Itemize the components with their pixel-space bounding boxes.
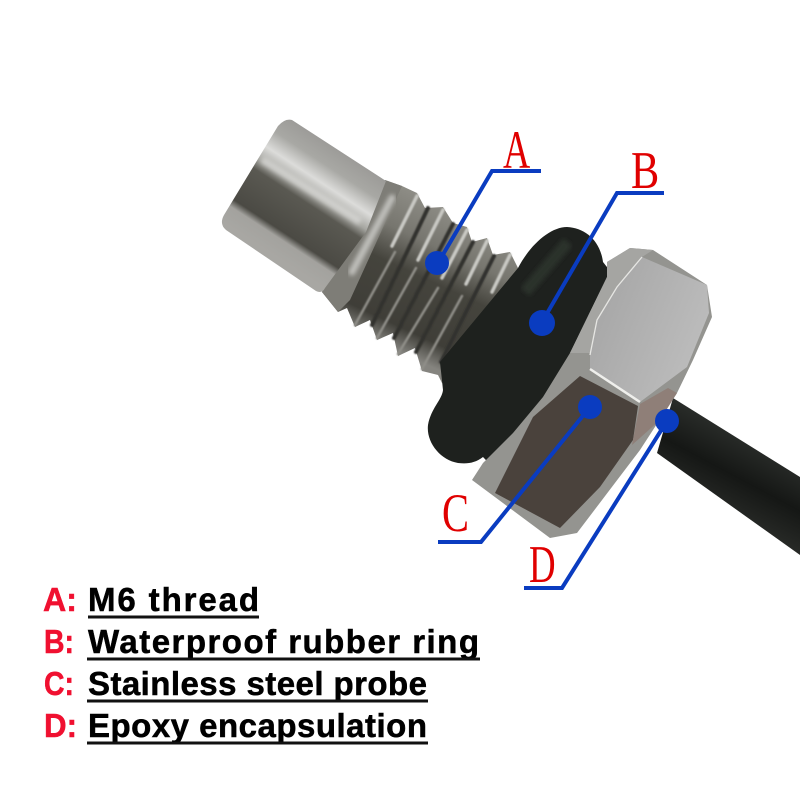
callout A bbox=[425, 120, 541, 275]
bevel edge bbox=[590, 369, 640, 402]
legend D: D: bbox=[44, 707, 77, 744]
cylindrical end cap bbox=[222, 120, 386, 292]
callout C bbox=[438, 395, 602, 543]
callout B: B bbox=[631, 142, 659, 200]
rubber ring bbox=[428, 227, 625, 480]
legend A: M6 thread bbox=[88, 581, 259, 618]
nut lit face bbox=[590, 257, 709, 402]
callout D: D bbox=[529, 534, 556, 594]
callout D bbox=[524, 409, 679, 594]
nut dark end face bbox=[495, 376, 638, 528]
callout A: A bbox=[503, 120, 530, 181]
legend B: Waterproof rubber ring bbox=[88, 623, 479, 660]
legend C: Stainless steel probe bbox=[88, 665, 427, 702]
legend A: A: bbox=[43, 581, 77, 618]
cable bbox=[657, 398, 800, 555]
nut upper rim bbox=[570, 248, 653, 353]
hex nut bbox=[472, 248, 712, 538]
sensor probe photo bbox=[222, 120, 800, 555]
legend bbox=[43, 581, 480, 744]
callout B bbox=[529, 142, 664, 336]
ring highlight bbox=[525, 242, 568, 292]
legend D: Epoxy encapsulation bbox=[88, 707, 427, 744]
callout C: C bbox=[442, 483, 469, 543]
collar bbox=[322, 180, 402, 312]
legend C: C: bbox=[44, 665, 74, 702]
legend B: B: bbox=[44, 623, 74, 660]
threaded shaft bbox=[322, 180, 540, 400]
